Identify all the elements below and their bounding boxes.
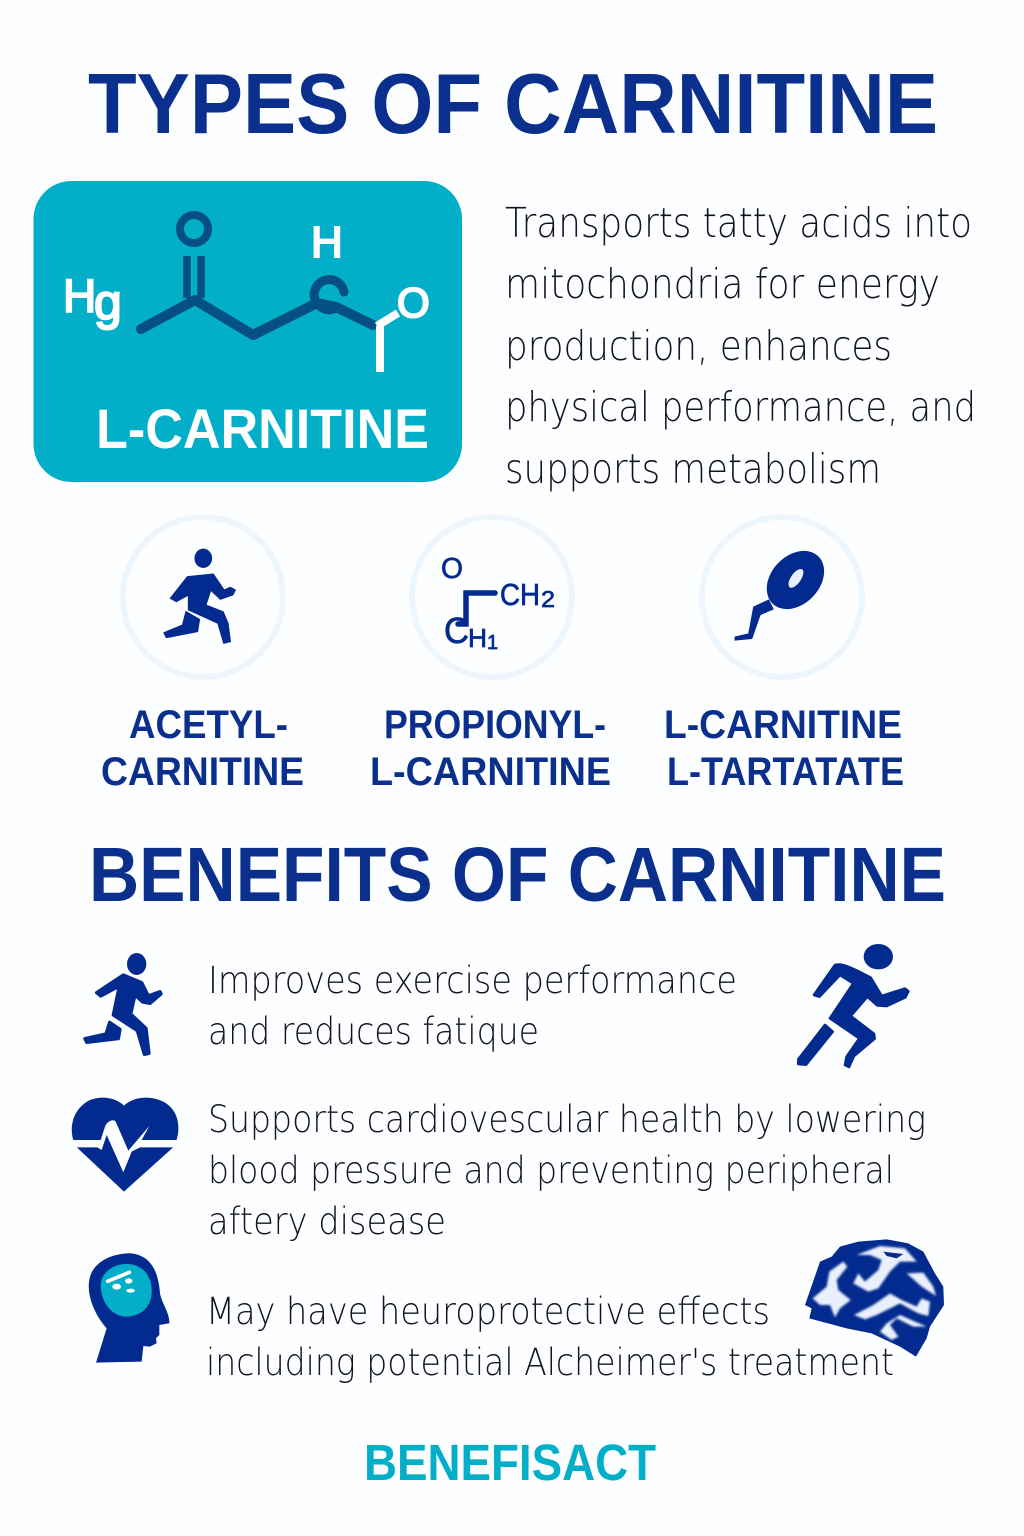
icon: chemical formula: 2 — [541, 586, 555, 612]
type name: L-CARNITINE — [370, 750, 611, 794]
benefit text: including potential Alcheimer's treatment — [206, 1341, 894, 1384]
type name — [664, 703, 904, 794]
L-Carnitine description: supports metabolism — [505, 445, 881, 493]
benefit text: blood pressure and preventing peripheral — [208, 1149, 894, 1192]
type name — [370, 703, 611, 794]
benefit text: Supports cardiovescular health by lowering — [208, 1098, 926, 1141]
molecule diagram: H — [311, 218, 343, 267]
heading: benefits: BENEFITS OF CARNITINE — [89, 832, 946, 918]
icon: chemical formula: CH — [500, 577, 540, 612]
icon: brain — [805, 1239, 944, 1357]
L-Carnitine description — [505, 199, 976, 493]
icon: runner — [164, 549, 235, 643]
icon: chemical formula: C — [444, 610, 469, 651]
molecule diagram: g — [94, 274, 122, 330]
benefit: exercise performance — [85, 945, 908, 1067]
L-Carnitine description: mitochondria for energy — [505, 260, 940, 308]
icon: chemical formula: H — [468, 623, 487, 653]
type: L-Carnitine L-Tartrate — [664, 517, 904, 794]
icon: chemical formula: O — [441, 553, 463, 585]
benefit text: Improves exercise performance — [208, 959, 737, 1002]
icon: chemical formula — [441, 553, 555, 654]
benefit: cardiovascular health — [70, 1098, 926, 1243]
icon: head with brain — [89, 1253, 169, 1363]
molecule diagram: O — [397, 279, 430, 326]
icon: chemical formula: 1 — [487, 632, 498, 654]
type name: ACETYL- — [129, 703, 288, 747]
icon: sperm cell — [735, 546, 834, 641]
molecule diagram — [63, 215, 430, 372]
footer brand: BENEFISACT — [364, 1434, 656, 1491]
panel: L-Carnitine molecule card — [34, 181, 462, 482]
type name — [101, 703, 304, 794]
benefit text: and reduces fatique — [208, 1010, 539, 1053]
type name: PROPIONYL- — [384, 703, 606, 747]
type name: L-TARTATATE — [667, 750, 904, 794]
benefit: neuroprotection — [89, 1239, 944, 1384]
benefit text: May have heuroprotective effects — [206, 1290, 770, 1333]
type: Propionyl-L-Carnitine — [370, 517, 611, 794]
benefit text: aftery disease — [208, 1200, 446, 1243]
benefit text — [208, 959, 737, 1053]
molecule diagram: H — [63, 270, 96, 322]
L-Carnitine description: production, enhances — [505, 322, 892, 370]
benefit text — [206, 1290, 894, 1384]
type name: CARNITINE — [101, 750, 304, 794]
icon: heart with pulse — [70, 1098, 180, 1192]
type name: L-CARNITINE — [664, 703, 902, 747]
icon: large runner — [798, 945, 908, 1067]
title: TYPES OF CARNITINE — [88, 57, 938, 152]
panel label: L-CARNITINE — [96, 397, 429, 460]
type: Acetyl-Carnitine — [101, 517, 304, 794]
icon: small runner — [85, 955, 161, 1054]
benefit text — [208, 1098, 926, 1243]
